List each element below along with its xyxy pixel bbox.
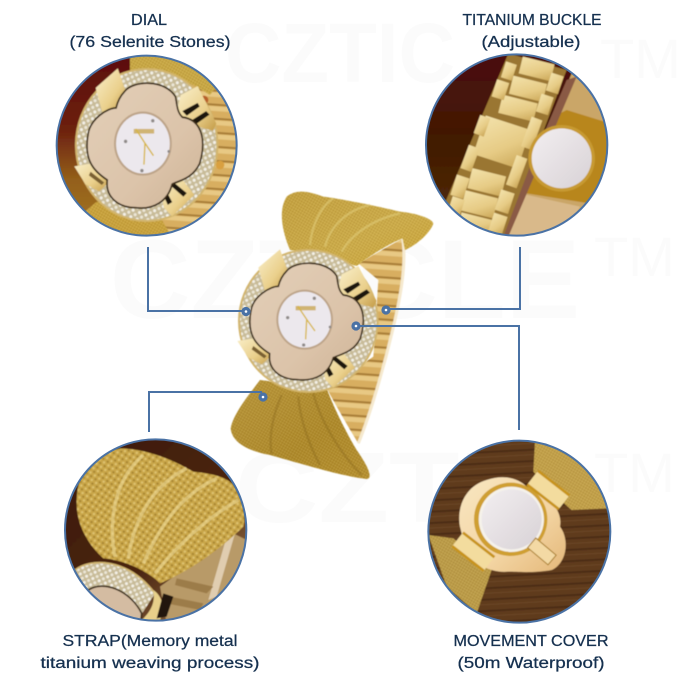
central watch photo xyxy=(231,192,433,479)
watermark: CZTIC xyxy=(235,432,575,544)
heading: dial: (76 Selenite Stones) xyxy=(70,34,230,51)
callout dot: dial xyxy=(241,307,251,316)
panel: movement cover close-up xyxy=(427,440,612,624)
heading: titanium buckle xyxy=(462,12,602,51)
heading: movement cover: (50m Waterproof) xyxy=(458,655,604,672)
panel: titanium buckle close-up xyxy=(425,53,608,237)
connector: movement cover xyxy=(356,326,519,430)
inner bracelet links xyxy=(327,238,404,443)
connector: buckle xyxy=(386,247,520,309)
callout dot: strap xyxy=(258,392,268,402)
heading: strap: titanium weaving process) xyxy=(40,655,260,672)
heading: strap: STRAP(Memory metal xyxy=(62,633,238,650)
watermark: TM xyxy=(594,225,675,288)
panel: dial close-up xyxy=(56,54,238,237)
heading: dial xyxy=(70,12,230,51)
watch head xyxy=(237,249,379,393)
callout dot: movement cover xyxy=(351,321,361,331)
watermark: TM xyxy=(600,27,679,90)
upper mesh strap xyxy=(282,192,433,266)
heading: dial: DIAL xyxy=(131,12,167,29)
connector: strap xyxy=(149,392,262,432)
heading: movement cover: MOVEMENT COVER xyxy=(454,633,608,650)
connector: dial xyxy=(148,247,246,311)
watermark xyxy=(110,6,679,544)
heading: movement cover xyxy=(454,633,608,672)
panel: strap close-up xyxy=(64,438,248,622)
heading: titanium buckle: TITANIUM BUCKLE xyxy=(462,12,602,29)
watermark: CZTIC xyxy=(225,6,455,100)
heading: titanium buckle: (Adjustable) xyxy=(482,34,580,51)
watermark: TM xyxy=(594,441,675,504)
callout dot: buckle xyxy=(381,305,391,315)
lower mesh strap xyxy=(231,380,370,479)
watermark: CZTICLE xyxy=(110,217,580,342)
heading: strap xyxy=(40,633,260,672)
